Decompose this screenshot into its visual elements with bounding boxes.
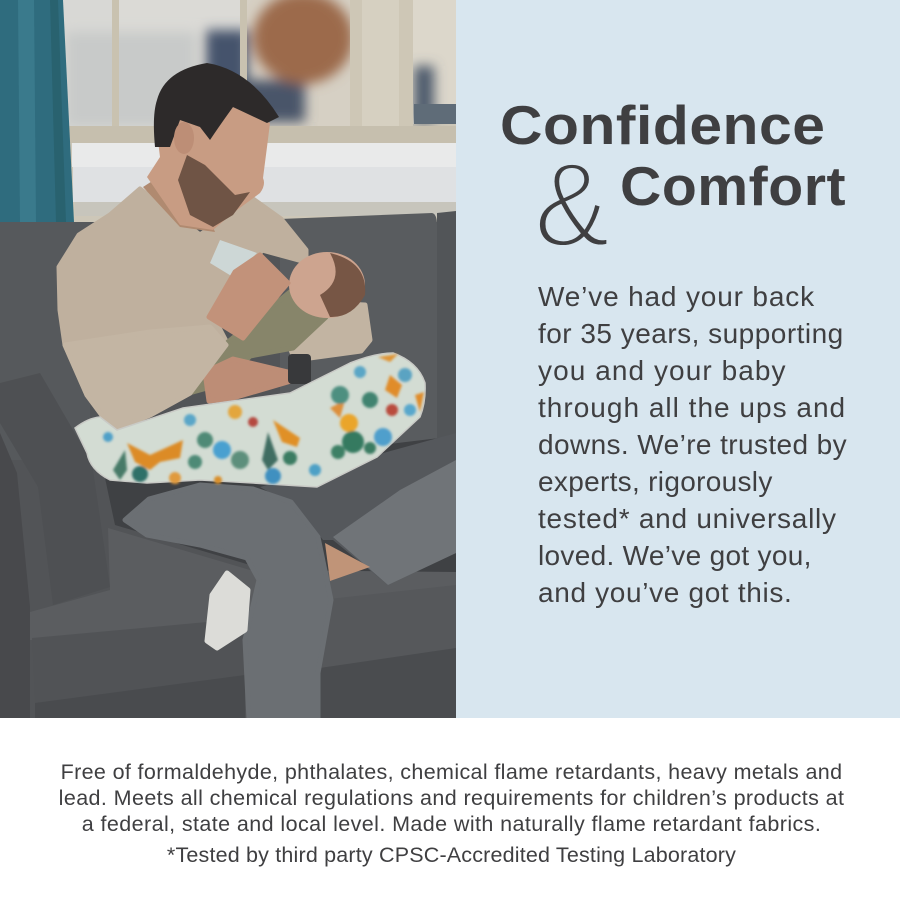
sofa arm — [0, 433, 30, 718]
text block: brand message: through all the ups and — [538, 392, 846, 423]
baby head — [289, 252, 365, 318]
heading ampersand: & — [534, 138, 610, 272]
lower hand — [205, 359, 291, 401]
nursing pillow — [75, 353, 425, 487]
hair — [154, 63, 279, 147]
arm pillow — [0, 373, 110, 605]
text block: brand message: and you’ve got this. — [538, 577, 792, 608]
text block: brand message: experts, rigorously — [538, 466, 773, 497]
window mullions — [112, 0, 119, 126]
text block: brand message: you and your baby — [538, 355, 787, 386]
ear — [174, 122, 194, 154]
jeans: near leg — [125, 485, 331, 720]
text block: safety statement — [59, 760, 844, 836]
window and wall — [60, 0, 456, 216]
text block: brand message: We’ve had your back — [538, 281, 815, 312]
sweater — [59, 189, 370, 430]
face — [147, 107, 270, 230]
sofa — [0, 211, 456, 718]
text block: brand message: for 35 years, supporting — [538, 318, 844, 349]
heading line: Confidence: Confidence — [500, 94, 825, 156]
panel: pale blue message background — [456, 0, 900, 718]
footnote: testing laboratory: *Tested by third party CPSC-Accredited Testing Laboratory — [167, 843, 736, 867]
beard — [178, 155, 250, 227]
jeans: far leg — [260, 433, 456, 585]
text block: safety statement: lead. Meets all chemical regulations and requirements for children’s products at — [59, 786, 844, 810]
heading: Confidence & Comfort — [500, 94, 846, 272]
photo: father bottle-feeding baby on sofa with nursing pillow — [0, 0, 456, 718]
seat cushion front panel — [32, 622, 245, 703]
heading line: Comfort: Comfort — [620, 155, 846, 217]
baby body — [182, 292, 326, 395]
curtain — [0, 0, 74, 222]
sweater forearm — [65, 327, 226, 430]
text block: brand message: downs. We’re trusted by — [538, 429, 847, 460]
ankle — [325, 543, 370, 581]
bottle — [210, 240, 257, 277]
upper hand and forearm — [209, 255, 288, 338]
text block: brand message — [538, 281, 847, 608]
watch — [288, 354, 311, 384]
neck — [143, 160, 215, 232]
text block: brand message: loved. We’ve got you, — [538, 540, 812, 571]
text block: safety statement: Free of formaldehyde, phthalates, chemical flame retardants, heavy metals and — [61, 760, 842, 784]
seat cushion top — [30, 528, 456, 660]
text block: safety statement: a federal, state and local level. Made with naturally flame retardant fabrics. — [82, 812, 821, 836]
text block: brand message: tested* and universally — [538, 503, 837, 534]
shoe — [207, 573, 248, 648]
